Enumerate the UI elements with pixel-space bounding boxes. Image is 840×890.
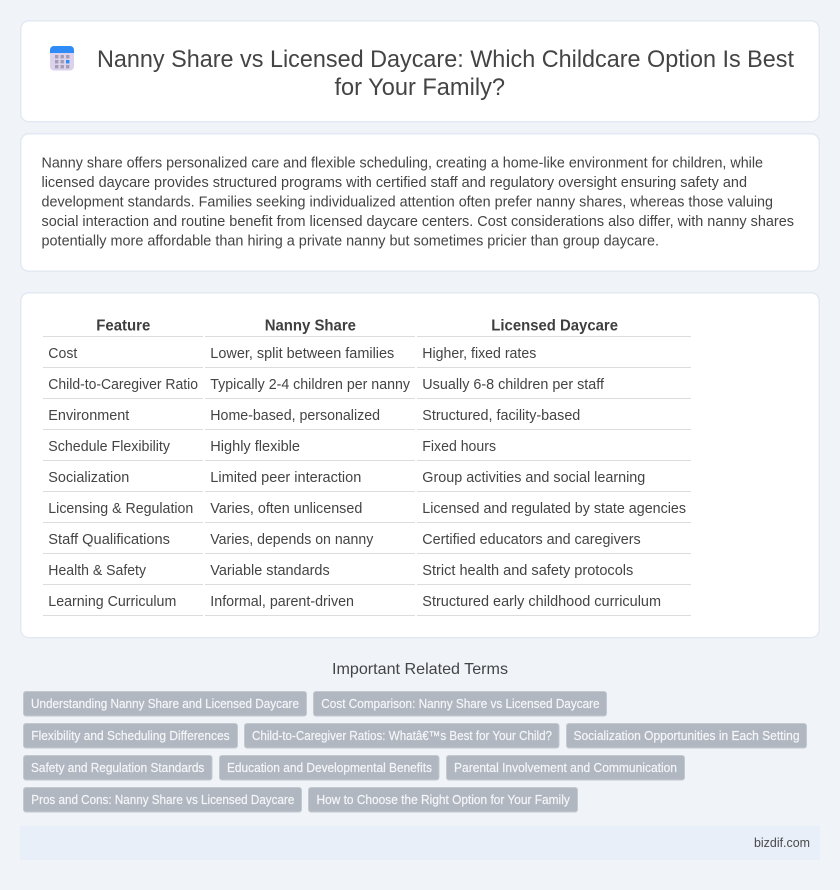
row: staff qualifications: Staff Qualifications bbox=[48, 532, 170, 548]
tag bbox=[24, 788, 302, 812]
table header: Nanny Share bbox=[265, 318, 356, 335]
row: staff qualifications bbox=[43, 532, 691, 554]
row: licensing: Licensing & Regulation bbox=[48, 501, 193, 517]
row: cost: Higher, fixed rates bbox=[422, 346, 536, 362]
tag: Education and Developmental Benefits bbox=[227, 761, 432, 775]
row: schedule flexibility: Schedule Flexibility bbox=[48, 439, 171, 455]
tag: Socialization Opportunities in Each Setting bbox=[574, 729, 800, 743]
row: environment: Home-based, personalized bbox=[210, 408, 380, 424]
tag: Cost Comparison: Nanny Share vs Licensed Daycare bbox=[321, 697, 600, 711]
row: licensing bbox=[43, 501, 691, 523]
row: environment: Structured, facility-based bbox=[422, 408, 580, 424]
row: socialization: Limited peer interaction bbox=[210, 470, 361, 486]
tags: related terms bbox=[24, 692, 806, 812]
icon: calendar bbox=[50, 46, 74, 70]
tag bbox=[24, 756, 212, 780]
tag bbox=[446, 756, 684, 780]
panel: comparison table bbox=[21, 293, 819, 638]
tag: Safety and Regulation Standards bbox=[31, 761, 204, 775]
panel: intro text bbox=[21, 134, 819, 271]
tag bbox=[308, 788, 578, 812]
row: staff qualifications: Certified educators and caregivers bbox=[422, 532, 641, 548]
tag bbox=[220, 756, 439, 780]
row: socialization: Group activities and social learning bbox=[422, 470, 645, 486]
row: licensing: Licensed and regulated by state agencies bbox=[422, 501, 686, 517]
row: ratio: Typically 2-4 children per nanny bbox=[210, 377, 411, 393]
text block: summary: development standards. Families seeking individualized attention often prefer nanny shares, whereas those valuing bbox=[42, 194, 773, 210]
text block: summary bbox=[42, 156, 794, 250]
row: health and safety bbox=[43, 563, 691, 585]
footer: bizdif.com bbox=[754, 835, 810, 850]
row: schedule flexibility: Fixed hours bbox=[422, 439, 496, 455]
tag: How to Choose the Right Option for Your Family bbox=[316, 793, 571, 807]
tag bbox=[24, 724, 238, 748]
title: Nanny Share vs Licensed Daycare: Which Childcare Option Is Best bbox=[97, 46, 794, 73]
tag: Pros and Cons: Nanny Share vs Licensed Daycare bbox=[31, 793, 294, 807]
table header: Licensed Daycare bbox=[491, 318, 618, 335]
title: for Your Family? bbox=[334, 74, 505, 101]
row: environment: Environment bbox=[48, 408, 129, 424]
tag: Flexibility and Scheduling Differences bbox=[31, 729, 230, 743]
row: socialization bbox=[43, 470, 691, 492]
footer bbox=[20, 826, 820, 860]
tag bbox=[566, 724, 806, 748]
row: ratio: Usually 6-8 children per staff bbox=[422, 377, 605, 393]
tag: Parental Involvement and Communication bbox=[454, 761, 677, 775]
tag bbox=[24, 692, 306, 716]
row: schedule flexibility: Highly flexible bbox=[210, 439, 300, 455]
row: learning curriculum bbox=[43, 594, 691, 616]
tag bbox=[314, 692, 606, 716]
row: learning curriculum: Informal, parent-driven bbox=[210, 594, 354, 610]
row: environment bbox=[43, 408, 691, 430]
row: cost: Cost bbox=[48, 346, 77, 362]
row: licensing: Varies, often unlicensed bbox=[210, 501, 362, 517]
row: health and safety: Strict health and safety protocols bbox=[422, 563, 633, 579]
text block: summary: social interaction and routine benefit from licensed daycare centers. Cost considerations also differ, with nanny shares bbox=[42, 214, 794, 230]
row: ratio: Child-to-Caregiver Ratio bbox=[48, 377, 198, 393]
text block: summary: Nanny share offers personalized care and flexible scheduling, creating a home-like environment for children, while bbox=[42, 156, 763, 172]
title bbox=[97, 46, 794, 101]
panel: header bbox=[21, 21, 819, 122]
row: schedule flexibility bbox=[43, 439, 691, 461]
row: cost bbox=[43, 346, 691, 368]
row: staff qualifications: Varies, depends on nanny bbox=[210, 532, 374, 548]
row: learning curriculum: Learning Curriculum bbox=[48, 594, 176, 610]
row: learning curriculum: Structured early childhood curriculum bbox=[422, 594, 661, 610]
row: health and safety: Variable standards bbox=[210, 563, 330, 579]
tag: Understanding Nanny Share and Licensed Daycare bbox=[31, 697, 299, 711]
row: cost: Lower, split between families bbox=[210, 346, 394, 362]
row: health and safety: Health & Safety bbox=[48, 563, 147, 579]
tag bbox=[244, 724, 559, 748]
row: socialization: Socialization bbox=[48, 470, 129, 486]
row: ratio bbox=[43, 377, 691, 399]
table header bbox=[43, 318, 691, 337]
heading: related terms: Important Related Terms bbox=[332, 661, 508, 678]
text block: summary: potentially more affordable than hiring a private nanny but sometimes pricier than group daycare. bbox=[42, 234, 659, 250]
tag: Child-to-Caregiver Ratios: Whatâ€™s Best for Your Child? bbox=[252, 729, 552, 743]
text block: summary: licensed daycare provides structured programs with certified staff and regulatory oversight ensuring safety and bbox=[42, 175, 747, 191]
table header: Feature bbox=[96, 318, 150, 335]
